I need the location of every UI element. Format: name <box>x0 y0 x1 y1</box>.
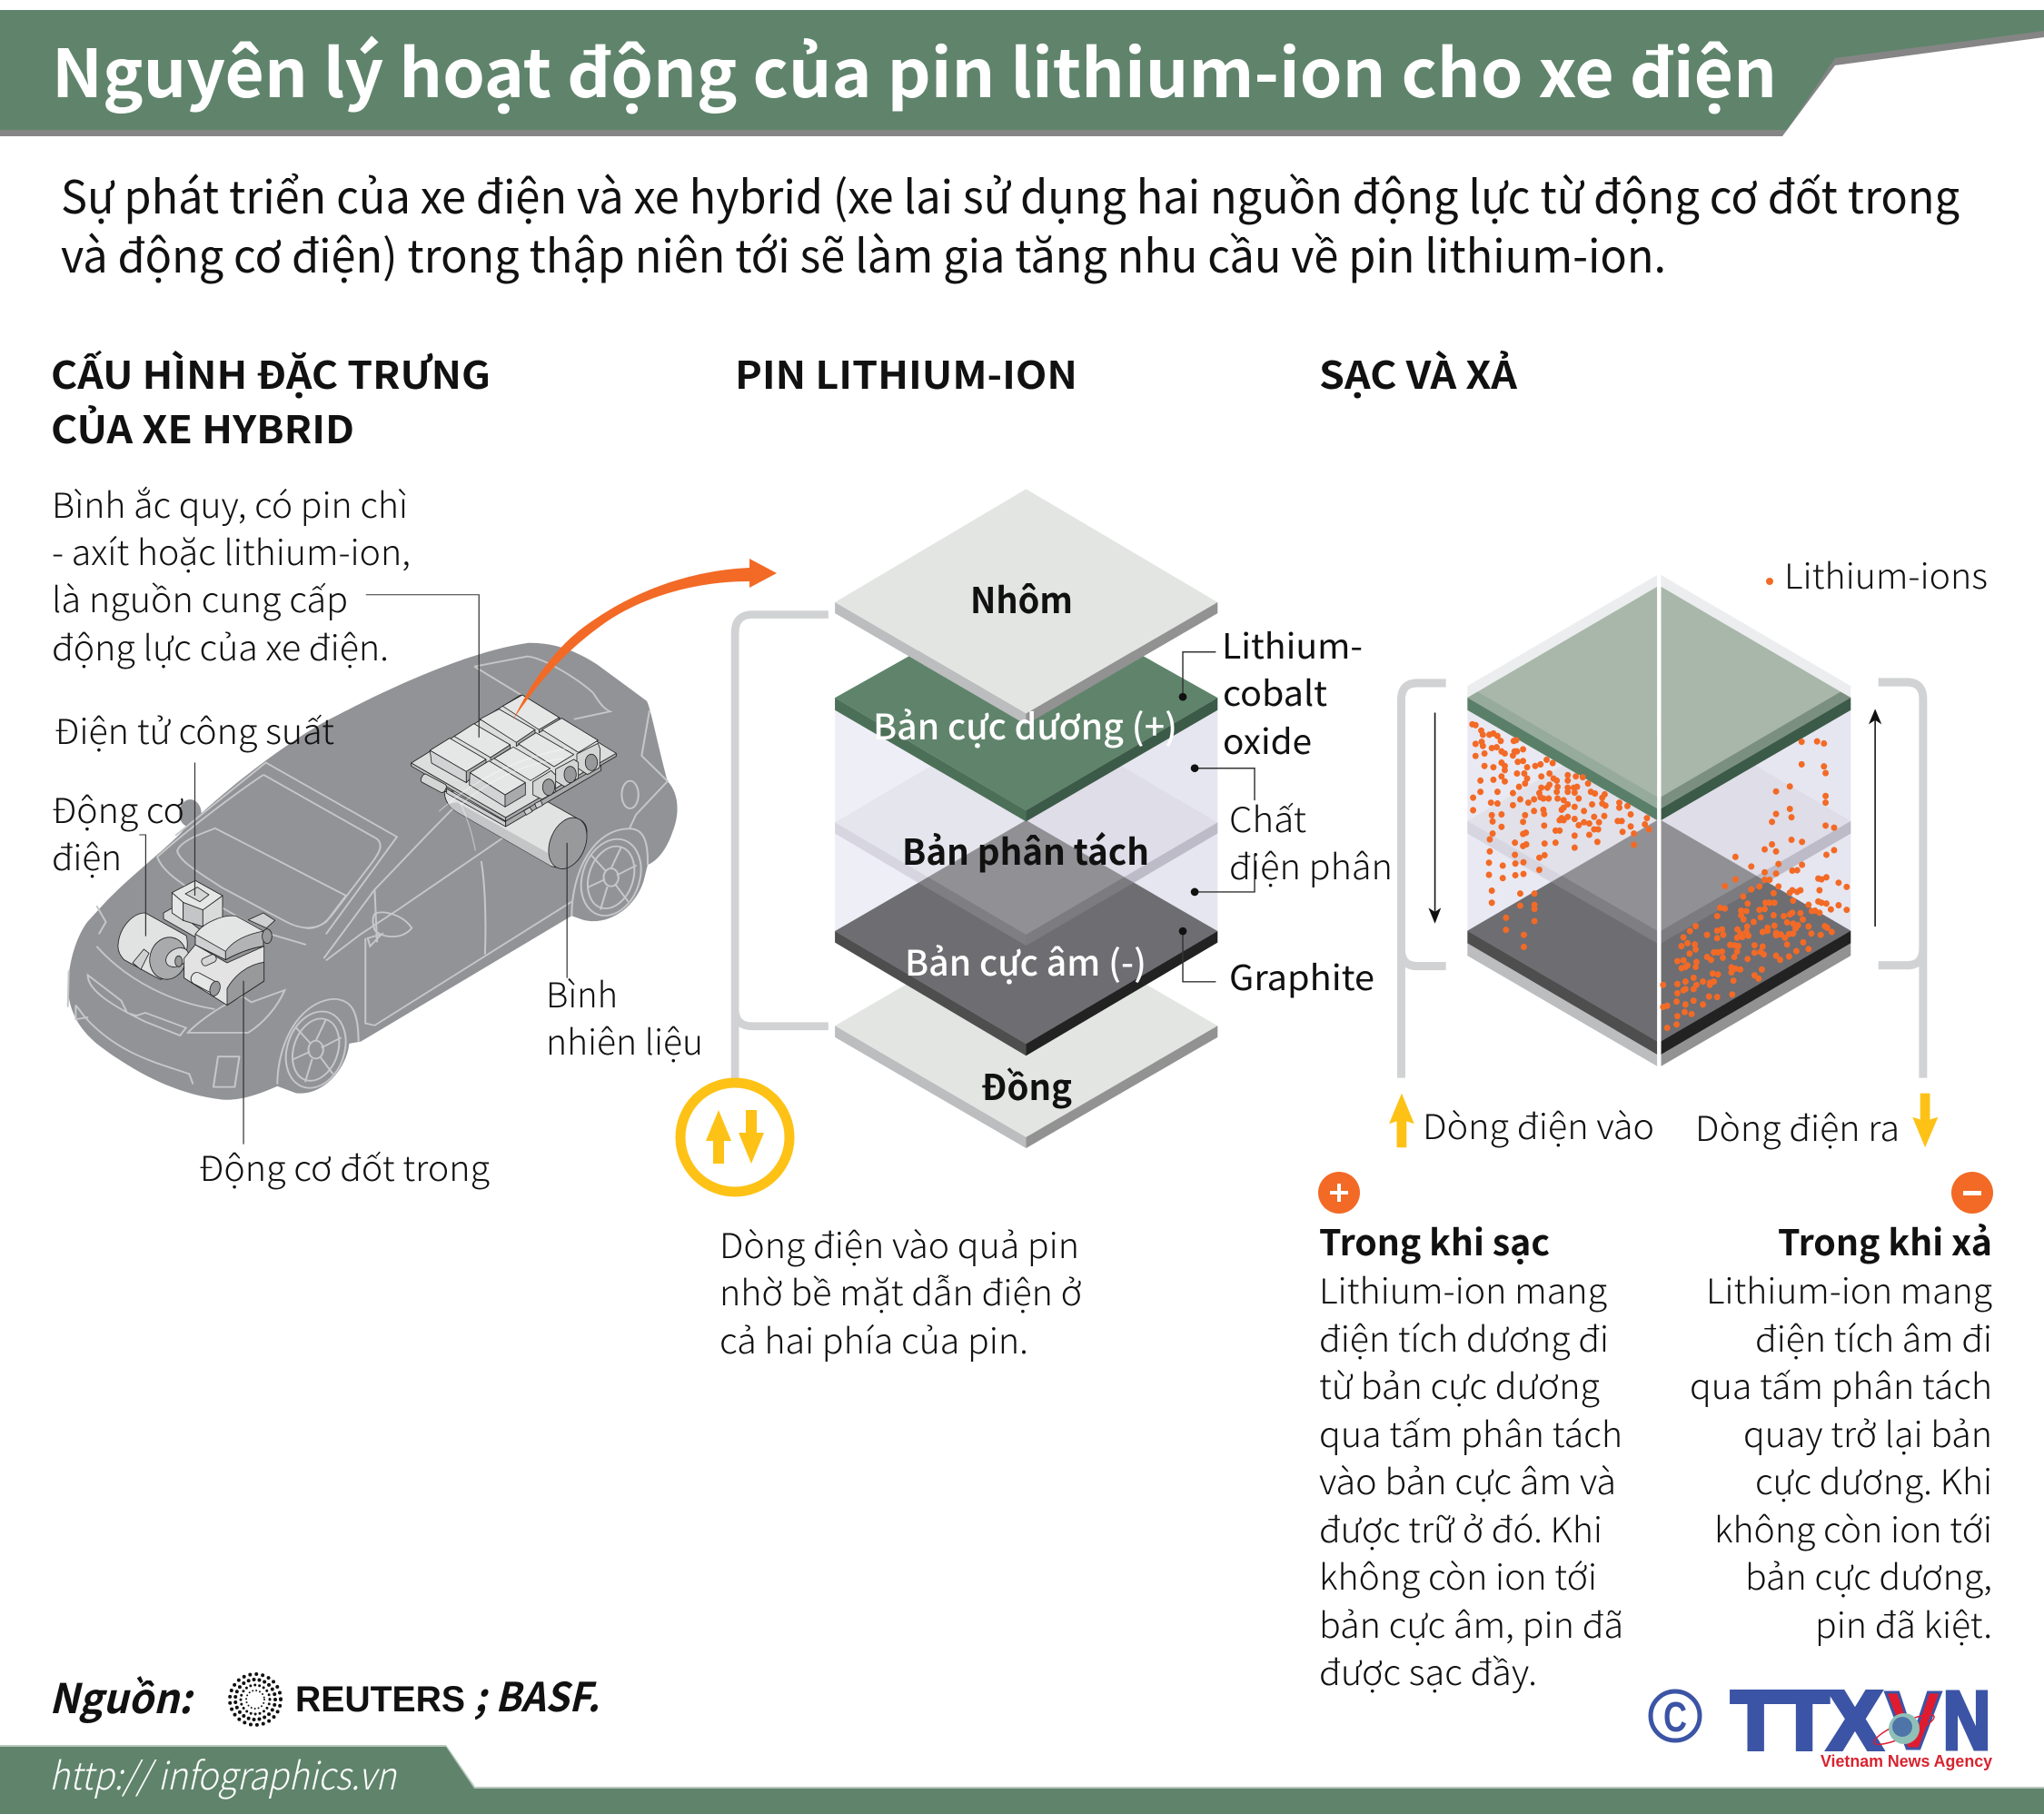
leader lines for car labels <box>139 595 567 1145</box>
text: while discharging <box>1690 1215 1992 1648</box>
text: while discharging: bản cực dương, <box>1745 1550 1992 1600</box>
layer: aluminium <box>835 489 1217 725</box>
icon: plus <box>1318 1172 1360 1214</box>
arrow: ion flow down <box>1428 713 1441 924</box>
text: while charging <box>1319 1215 1623 1695</box>
layer: copper <box>835 915 1217 1148</box>
fuel tank <box>444 787 594 875</box>
copyright mark: C <box>1663 1693 1687 1740</box>
stack labels: Đồng <box>981 1060 1072 1111</box>
label: battery: động lực của xe điện. <box>52 620 389 670</box>
icon: minus <box>1951 1172 1993 1214</box>
bracket: current collector <box>735 615 829 1080</box>
text: current flow note <box>719 1218 1082 1363</box>
brackets <box>1401 682 1923 1078</box>
source line: REUTERS <box>295 1680 465 1720</box>
text: while charging: qua tấm phân tách <box>1319 1407 1622 1457</box>
stack labels: Bản cực dương (+) <box>873 699 1177 750</box>
header banner <box>0 10 2044 136</box>
legend: lithium ions: Lithium-ions <box>1784 549 1988 599</box>
label: power electronics: Điện tử công suất <box>55 704 334 754</box>
title: Nguyên lý hoạt động của pin lithium-ion cho xe điện <box>52 21 1777 117</box>
arrow: current out <box>1912 1094 1938 1147</box>
label: current in: Dòng điện vào <box>1423 1099 1654 1149</box>
car shell <box>68 643 678 1100</box>
text: while discharging: Lithium-ion mang <box>1706 1264 1992 1313</box>
layer: cathode <box>835 590 1217 821</box>
footer url: http:// infographics.vn <box>49 1746 398 1801</box>
text: while discharging: không còn ion tới <box>1714 1502 1992 1552</box>
label: electrolyte: Chất <box>1229 792 1306 842</box>
source line: ; BASF. <box>474 1665 600 1723</box>
footer band <box>0 1745 2044 1814</box>
text: current flow note: Dòng điện vào quả pin <box>719 1218 1079 1268</box>
panel: hybrid car illustration <box>68 643 678 1100</box>
label: battery: Bình ắc quy, có pin chì <box>52 478 408 528</box>
text: while discharging: Trong khi xả <box>1778 1215 1992 1266</box>
text: while discharging: điện tích âm đi <box>1755 1312 1992 1362</box>
fuel tank and battery pack <box>412 695 616 875</box>
text: while charging: được trữ ở đó. Khi <box>1319 1502 1602 1552</box>
lithium ions: discharging <box>1663 741 1847 1028</box>
logo: TTXVN: V <box>1885 1676 1941 1767</box>
layer leader lines <box>1179 652 1255 982</box>
text: while discharging: cực dương. Khi <box>1755 1454 1992 1504</box>
text: while charging: vào bản cực âm và <box>1319 1454 1616 1504</box>
icon: reuters dot globe <box>230 1674 281 1725</box>
label: current out: Dòng điện ra <box>1695 1101 1900 1151</box>
stack labels <box>873 573 1177 1111</box>
label: battery: - axít hoặc lithium-ion, <box>52 525 411 575</box>
text: while charging: Trong khi sạc <box>1319 1215 1550 1266</box>
lithium ions: charging <box>1473 724 1649 947</box>
label: graphite: Graphite <box>1229 950 1374 1000</box>
panel: charge discharge diagram <box>1389 575 1938 1147</box>
text: while charging: điện tích dương đi <box>1319 1312 1609 1362</box>
label: electric motor: Động cơ <box>52 783 184 833</box>
source line: Nguồn: <box>49 1666 194 1725</box>
car body <box>68 643 678 1100</box>
stack labels: Bản cực âm (-) <box>905 936 1146 986</box>
intro text: Sự phát triển của xe điện và xe hybrid (xe lai sử dụng hai nguồn động lực từ động cơ đốt trong <box>61 162 1960 227</box>
copyright mark <box>1651 1691 1700 1740</box>
label: fuel tank: Bình <box>546 967 618 1017</box>
engine group <box>118 880 275 1006</box>
icon: current arrows circle <box>680 1083 789 1192</box>
text: while discharging: pin đã kiệt. <box>1815 1598 1992 1648</box>
label: lithium-cobalt oxide: cobalt <box>1223 666 1327 716</box>
arrow: ion flow up <box>1869 709 1881 927</box>
charging half cell <box>1467 575 1657 1066</box>
text: current flow note: cả hai phía của pin. <box>719 1313 1028 1363</box>
wheels <box>277 834 650 1094</box>
car outline details <box>68 657 668 1087</box>
intro text <box>61 162 1960 286</box>
panel: battery layer stack <box>735 489 1255 1148</box>
battery pack <box>412 695 616 851</box>
heading: lithium-ion battery: PIN LITHIUM-ION <box>735 345 1077 401</box>
heading: hybrid configuration: CẤU HÌNH ĐẶC TRƯNG <box>51 345 491 401</box>
text: while charging: bản cực âm, pin đã <box>1319 1598 1623 1648</box>
text: while charging: được sạc đầy. <box>1319 1645 1537 1695</box>
logo: TTXVN <box>1651 1676 1992 1770</box>
label: fuel tank <box>546 967 703 1065</box>
heading: hybrid configuration: CỦA XE HYBRID <box>51 400 354 455</box>
text: while charging: Lithium-ion mang <box>1319 1264 1607 1313</box>
logo: TTXVN: Vietnam News Agency <box>1821 1752 1992 1770</box>
layer: separator <box>835 710 1217 935</box>
stack labels: Bản phân tách <box>902 825 1149 876</box>
logo: TTXVN: TTX <box>1731 1676 1881 1767</box>
layer: anode <box>835 820 1217 1056</box>
intro text: và động cơ điện) trong thập niên tới sẽ làm gia tăng nhu cầu về pin lithium-ion. <box>61 221 1666 286</box>
label: fuel tank: nhiên liệu <box>546 1015 703 1065</box>
label: electrolyte <box>1229 792 1393 889</box>
label: electrolyte: điện phân <box>1229 839 1393 889</box>
stack labels: Nhôm <box>970 573 1073 624</box>
arrow: current in <box>1389 1094 1414 1147</box>
layer: electrolyte <box>835 710 1217 1044</box>
label: lithium-cobalt oxide: Lithium- <box>1222 619 1363 669</box>
label: combustion engine: Động cơ đốt trong <box>199 1141 490 1191</box>
heading: hybrid configuration <box>51 345 491 455</box>
label: lithium-cobalt oxide <box>1222 619 1363 764</box>
text: while discharging: qua tấm phân tách <box>1690 1359 1992 1409</box>
text: while charging: không còn ion tới <box>1319 1550 1597 1600</box>
text: while charging: từ bản cực dương <box>1319 1359 1600 1409</box>
text: while discharging: quay trở lại bản <box>1743 1407 1992 1457</box>
heading: charge and discharge: SẠC VÀ XẢ <box>1319 345 1518 401</box>
discharging half cell <box>1662 575 1851 1066</box>
text: current flow note: nhờ bề mặt dẫn điện ở <box>719 1265 1082 1315</box>
label: battery <box>52 478 411 670</box>
label: electric motor: điện <box>52 830 122 880</box>
label: electric motor <box>52 783 184 880</box>
source line <box>49 1665 600 1725</box>
arrow: orange car to battery <box>513 559 777 719</box>
logo: TTXVN: N <box>1943 1676 1990 1767</box>
label: battery: là nguồn cung cấp <box>52 572 348 622</box>
label: lithium-cobalt oxide: oxide <box>1223 714 1312 764</box>
